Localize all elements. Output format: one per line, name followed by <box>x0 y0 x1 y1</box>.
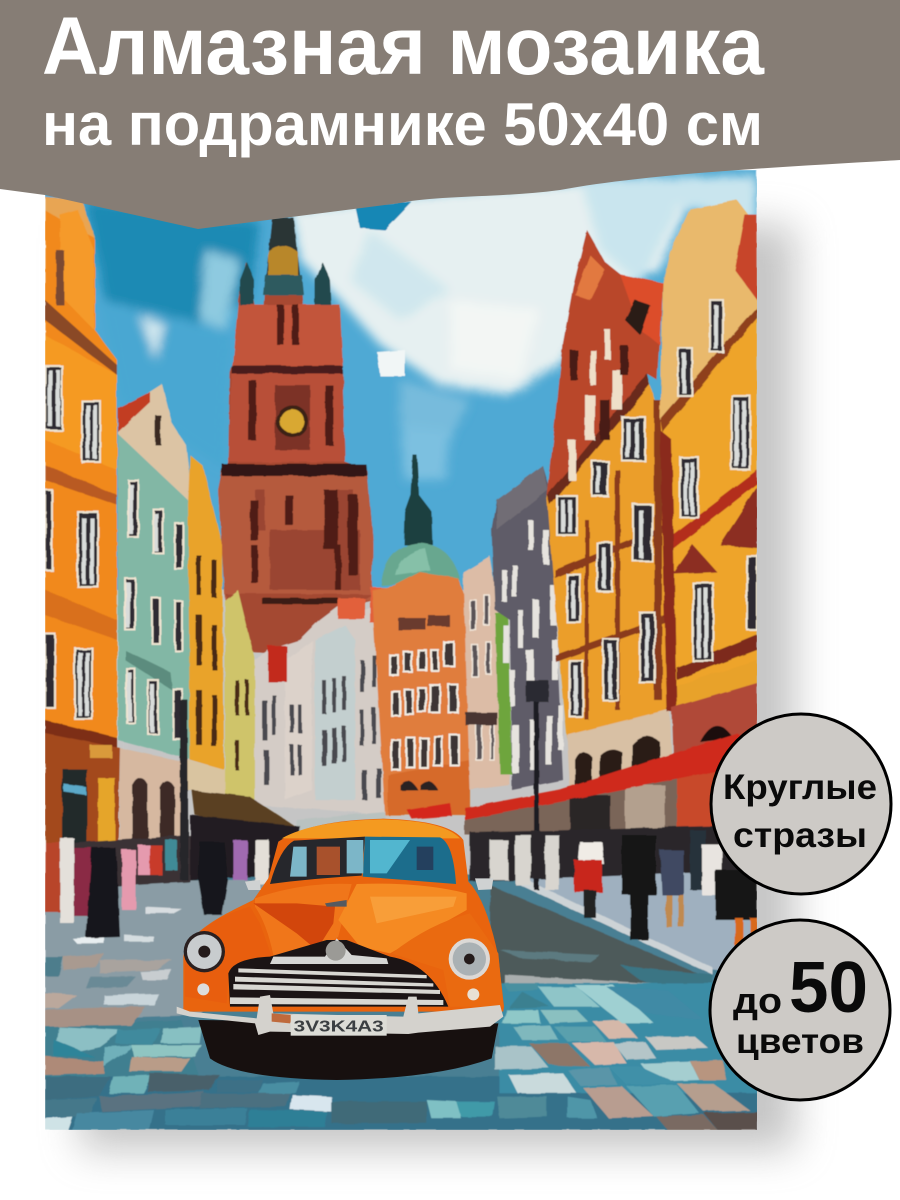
car hood highlights <box>255 884 352 955</box>
badge: round rhinestones <box>711 714 891 894</box>
windows on right houses <box>557 300 757 717</box>
car roof highlight <box>282 819 460 838</box>
subtitle: на подрамнике 50х40 см <box>42 91 763 158</box>
license plate <box>291 1015 387 1036</box>
car grille <box>228 940 448 1007</box>
orange car <box>177 819 504 1080</box>
car hood ornament and emblem <box>326 941 346 961</box>
sky <box>45 170 757 590</box>
car bumper <box>177 995 503 1035</box>
badge: up to 50 colours <box>710 920 890 1100</box>
ground street base <box>45 872 752 1078</box>
building: orange mid house <box>372 572 470 815</box>
header banner <box>0 0 900 229</box>
right street crowd <box>470 825 757 948</box>
painting on canvas <box>45 170 758 1130</box>
shop fronts and left street crowd <box>45 700 300 938</box>
cathedral tower <box>218 218 373 655</box>
painting scenery <box>45 170 758 1130</box>
shop fronts under awning <box>463 772 715 836</box>
car windshield <box>270 837 365 884</box>
license plate: 3V3K4A3 <box>294 1019 384 1036</box>
upper gable of big orange house <box>547 230 663 496</box>
car shadow and underbody <box>198 1020 498 1080</box>
badge: round rhinestones: Круглые <box>723 768 877 807</box>
badge: round rhinestones: стразы <box>733 816 867 855</box>
building: teal house <box>118 384 193 850</box>
badge: up to 50 colours: 50 <box>789 948 868 1028</box>
cobblestones <box>45 907 758 1130</box>
building: grey house <box>492 466 563 790</box>
awning and lamp post <box>407 680 750 890</box>
green dome <box>381 455 460 585</box>
canvas drop shadow <box>80 225 795 1150</box>
building: cream house <box>463 556 512 790</box>
car body <box>183 819 504 1012</box>
side mirrors <box>245 878 493 890</box>
building: right corner house <box>660 200 757 800</box>
car headlight left <box>184 931 225 995</box>
building: far left orange <box>45 197 120 850</box>
title: Алмазная мозаика <box>42 1 765 92</box>
building: yellow houses <box>188 455 255 800</box>
badge: up to 50 colours: цветов <box>736 1022 864 1061</box>
building: big orange house body <box>547 372 672 790</box>
badge: up to 50 colours: до <box>733 980 782 1021</box>
car headlight right <box>449 938 490 1000</box>
windows on left houses <box>45 366 183 739</box>
far houses <box>255 587 386 830</box>
